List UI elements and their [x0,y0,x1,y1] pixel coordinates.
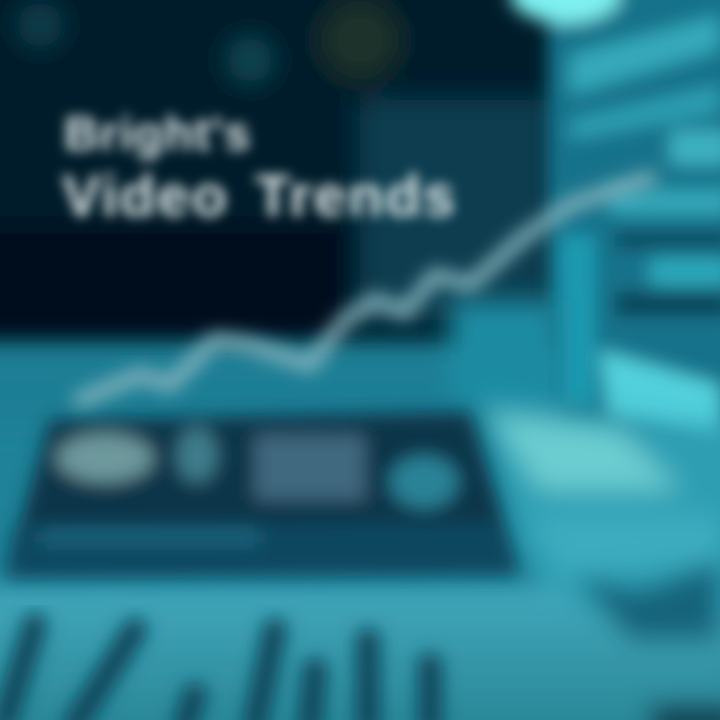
panel: teal desk surface [0,300,720,720]
chart: foreground bars [5,625,430,720]
panel: right side shelves [510,0,720,450]
title [55,107,462,229]
panel: dark upper wall [0,0,560,345]
chart: rising trend line [80,178,650,400]
title line one: Bright's [64,108,251,161]
panel: base teal [0,330,720,720]
title line two: Video Trends [62,164,457,229]
panel: dark laptop screen [5,412,520,578]
